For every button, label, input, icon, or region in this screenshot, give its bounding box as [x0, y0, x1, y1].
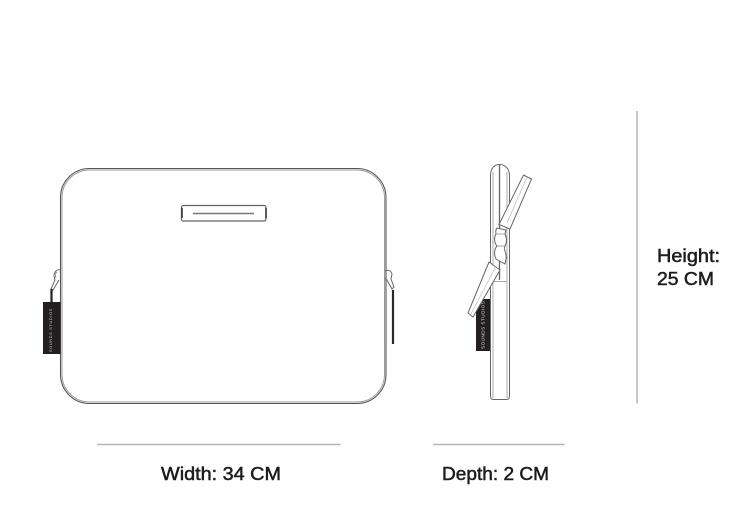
upper handle strap [499, 175, 532, 229]
side view of laptop sleeve [468, 164, 532, 400]
handle [182, 206, 266, 221]
width label: Width: 34 CM [161, 464, 281, 484]
front view of laptop sleeve [43, 168, 394, 404]
left zipper pull [51, 270, 60, 302]
height label [657, 246, 720, 289]
height label: 25 CM [657, 269, 714, 289]
lower handle strap [468, 262, 500, 317]
sleeve body outline [60, 168, 386, 404]
width dimension line [97, 444, 340, 446]
strap buckle [495, 228, 506, 264]
height label: Height: [657, 246, 720, 266]
right zipper pull [385, 270, 394, 344]
black tag on side view [476, 299, 494, 351]
side body [490, 164, 510, 400]
left black tag [43, 302, 60, 354]
depth label: Depth: 2 CM [442, 464, 549, 484]
tag lettering: SOUNDS STUDIOS [49, 308, 53, 352]
tag lettering: SOUNDS STUDIOS [480, 301, 486, 349]
depth dimension line [433, 444, 564, 446]
height dimension line [636, 111, 638, 404]
